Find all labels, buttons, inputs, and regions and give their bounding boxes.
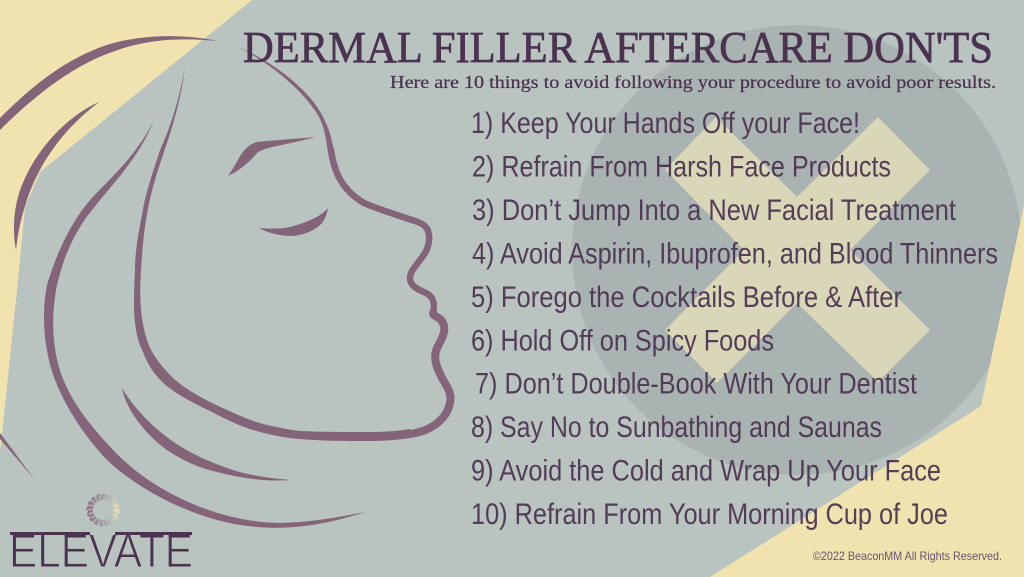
item 1: 1) Keep Your Hands Off your Face! — [471, 107, 860, 140]
list of ten don'ts — [471, 107, 998, 531]
item 9: 9) Avoid the Cold and Wrap Up Your Face — [471, 454, 941, 488]
item 8: 8) Say No to Sunbathing and Saunas — [471, 411, 882, 444]
item 10: 10) Refrain From Your Morning Cup of Joe — [471, 498, 948, 531]
icon: logo mandala ring — [88, 494, 118, 526]
copyright footer: ©2022 BeaconMM All Rights Reserved. — [813, 549, 1002, 563]
hair strand and jawline — [134, 67, 410, 441]
item 6: 6) Hold Off on Spicy Foods — [471, 324, 774, 358]
logo: Elevate — [9, 494, 193, 577]
hair strand: lower short — [122, 388, 293, 481]
hair strand: long outer — [44, 120, 365, 528]
item 2: 2) Refrain From Harsh Face Products — [472, 150, 891, 184]
nose line — [331, 150, 434, 313]
hair strand: top — [0, 36, 218, 130]
lips and chin line — [408, 313, 451, 434]
forehead line — [238, 47, 334, 152]
title: DERMAL FILLER AFTERCARE DON'TS — [243, 23, 993, 72]
illustration: woman's face profile with flowing hair — [0, 36, 451, 528]
item 5: 5) Forego the Cocktails Before & After — [471, 281, 902, 314]
hair strand: bottom left — [0, 433, 35, 480]
darker circle behind list — [572, 25, 1022, 475]
icon: large X mark — [665, 117, 930, 383]
logo top bar — [10, 532, 192, 535]
subtitle: Here are 10 things to avoid following your procedure to avoid poor results. — [390, 72, 996, 92]
eyebrow — [228, 137, 315, 176]
logo wordmark: ELEVATE — [9, 524, 193, 577]
hair strand: second — [14, 102, 99, 250]
item 7: 7) Don’t Double-Book With Your Dentist — [475, 368, 918, 400]
closed eyelash — [259, 208, 328, 236]
